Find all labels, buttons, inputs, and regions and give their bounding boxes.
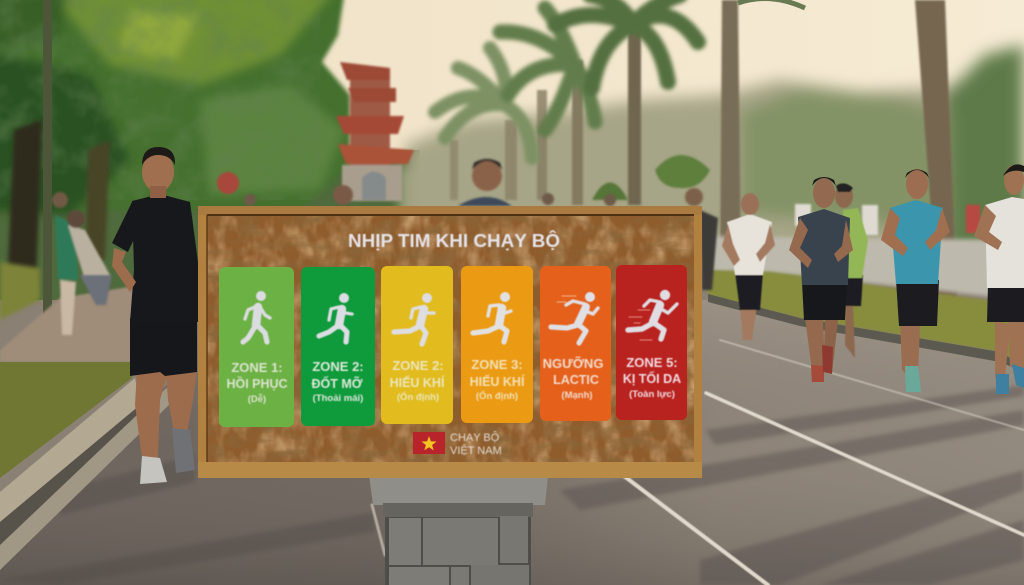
card label: (Dễ)	[248, 394, 266, 405]
icon: running figure	[394, 293, 434, 344]
right grass	[706, 270, 1024, 366]
mid-ground band behind the park	[0, 150, 1024, 300]
left grass	[0, 362, 135, 478]
icon: Vietnamese flag	[413, 432, 445, 454]
left tree foliage	[0, 0, 350, 215]
card: zone 3 aerobic, amber	[461, 266, 533, 423]
runner: white shirt, right edge	[974, 164, 1024, 394]
board frame	[198, 206, 702, 478]
board OSB surface	[207, 215, 694, 462]
card label: (Mạnh)	[561, 390, 593, 401]
stone pedestal	[369, 475, 548, 585]
runner: black shirt, left	[112, 147, 198, 484]
distant hazy trees	[405, 45, 1024, 250]
left tree trunks and lamp post	[7, 0, 110, 345]
background crowd	[52, 159, 980, 335]
icon: fast runner with speed lines	[551, 292, 598, 343]
left pavement	[0, 285, 200, 362]
card label: ZONE 2:	[312, 359, 364, 374]
distant path	[700, 236, 1024, 300]
runner: dark shirt	[789, 177, 853, 382]
heading: NHỊP TIM KHI CHẠY BỘ	[348, 230, 560, 251]
road shadows	[0, 385, 1024, 585]
card: zone 1 recovery	[219, 267, 294, 427]
card label: HỒI PHỤC	[226, 376, 288, 391]
pagoda	[217, 62, 414, 201]
card label: ZONE 5:	[626, 355, 678, 370]
road	[0, 300, 1024, 585]
card label: NGƯỠNG	[543, 356, 603, 371]
card: zone 2 fat burn	[301, 267, 375, 426]
card label	[470, 357, 525, 402]
footer text: CHẠY BỘ	[450, 431, 500, 444]
runner: teal shirt	[881, 169, 950, 392]
card label: ĐỐT MỠ	[312, 376, 363, 391]
sign board	[198, 206, 702, 478]
card label: ZONE 3:	[471, 357, 523, 372]
sky	[0, 0, 1024, 240]
card label	[390, 358, 445, 403]
card label	[226, 360, 288, 405]
card: zone 2 aerobic, yellow	[381, 266, 453, 424]
palm trees	[435, 0, 957, 303]
card label: LACTIC	[553, 373, 599, 387]
card label: HIẾU KHÍ	[390, 375, 445, 390]
icon: running figure	[473, 292, 511, 342]
card label: HIẾU KHÍ	[470, 374, 525, 389]
card: lactate threshold	[540, 266, 611, 421]
card label	[543, 356, 603, 401]
right curb	[708, 294, 1024, 372]
icon: walking figure	[243, 291, 270, 342]
footer text: VIỆT NAM	[450, 444, 502, 457]
runner: white shirt	[722, 193, 775, 340]
icon: sprinting runner with speed lines	[628, 290, 677, 340]
road lane lines	[372, 340, 1024, 585]
icon: jogging figure	[319, 293, 352, 342]
card label	[312, 359, 364, 404]
card label: KỊ TỐI DA	[623, 371, 681, 386]
card label	[623, 355, 681, 400]
runner: green shirt	[835, 183, 868, 358]
card label: (Ổn định)	[476, 390, 518, 402]
card label: (Thoải mái)	[313, 393, 363, 404]
card label: ZONE 2:	[392, 358, 444, 373]
card label: (Ổn định)	[397, 391, 439, 403]
card: zone 5 maximum	[616, 265, 687, 420]
card label: (Toàn lực)	[629, 389, 675, 400]
left curb	[0, 378, 172, 570]
footer text	[450, 431, 502, 457]
card label: ZONE 1:	[231, 360, 283, 375]
